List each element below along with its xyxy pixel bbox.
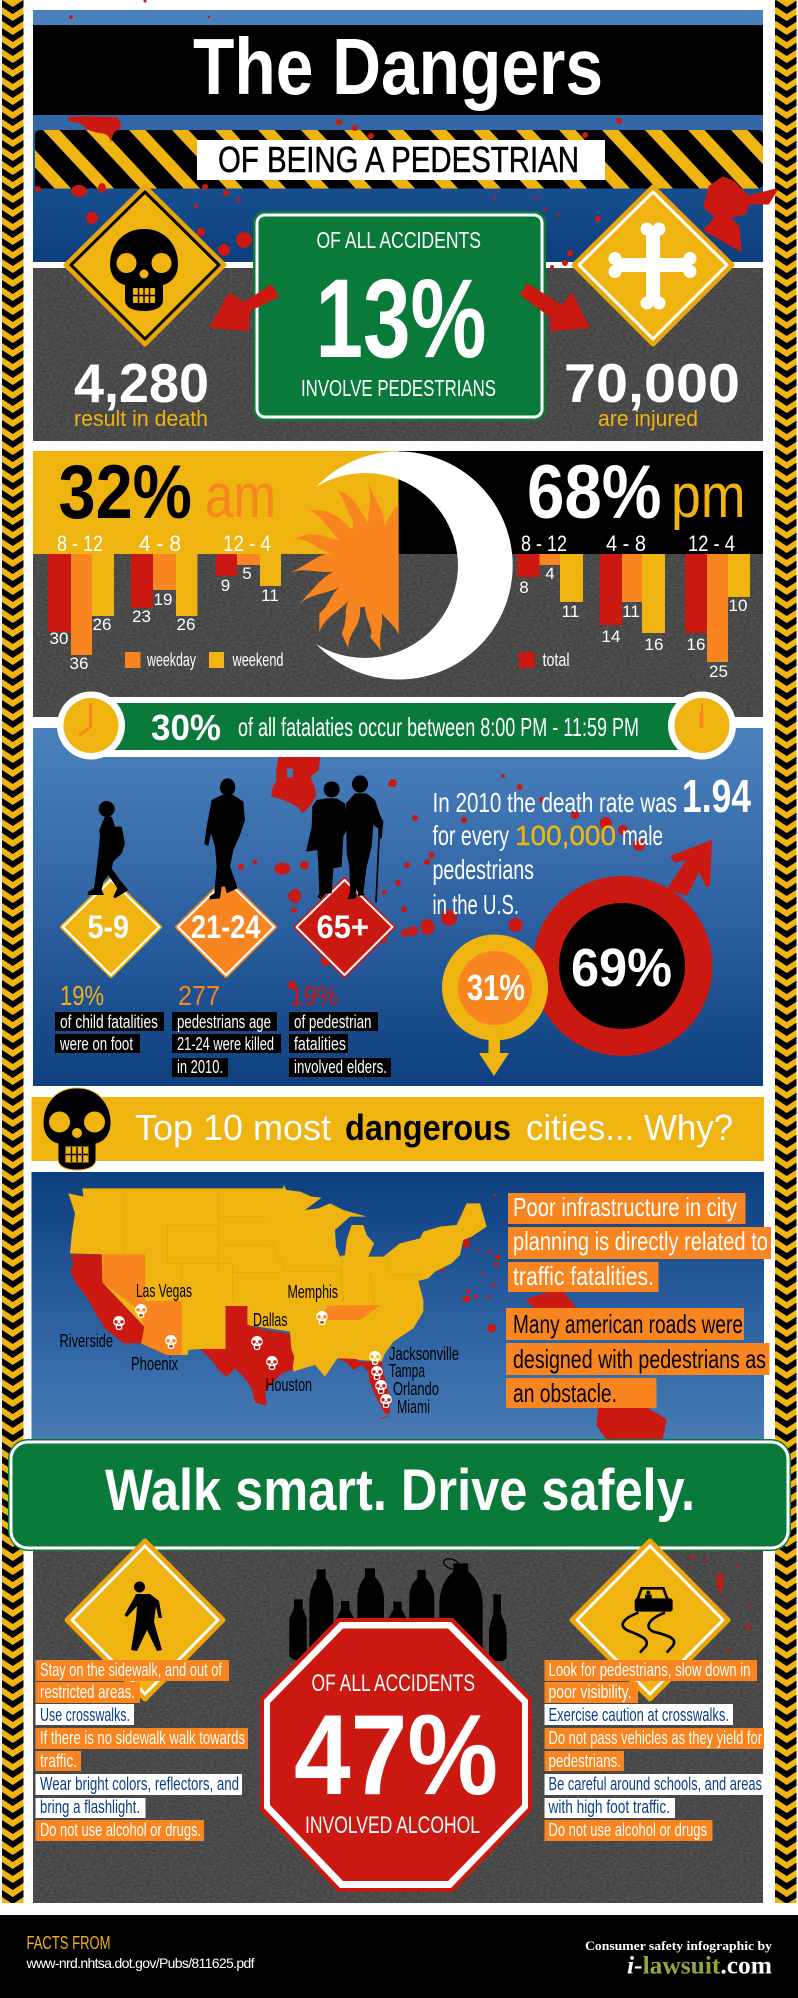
bar chart: am: 12 - 4 — [223, 531, 271, 556]
icon: skull warning sign — [66, 187, 224, 344]
bar chart: pm: 8 — [519, 578, 529, 597]
stat: elders: of pedestrian — [294, 1012, 372, 1032]
skull markers — [113, 1304, 392, 1408]
text block: american roads — [506, 1308, 770, 1408]
heading: 68% pm: 68% — [527, 450, 662, 535]
stat: young adults: 277 — [178, 980, 220, 1011]
legend: am: weekday — [146, 650, 196, 670]
panel: demographics — [33, 728, 763, 1086]
city labels: Memphis — [288, 1282, 338, 1302]
text block: poor infrastructure: Poor infrastructure in city — [513, 1192, 737, 1222]
text block: death rate: 1.94 — [682, 770, 751, 822]
legend: pm: total — [542, 650, 570, 670]
text block: poor infrastructure: traffic fatalities. — [513, 1261, 654, 1291]
list: driver tips: pedestrians. — [548, 1751, 621, 1771]
panel: time of day — [33, 450, 763, 717]
credit: Consumer safety infographic by — [585, 1939, 773, 1953]
text block: death rate: in the U.S. — [432, 889, 519, 920]
bar chart: am: 26 — [177, 615, 195, 634]
legend: am — [125, 650, 284, 670]
title: The Dangers — [193, 22, 603, 111]
stat: deaths: result in death — [74, 406, 208, 431]
icon: elderly couple — [306, 775, 383, 903]
title band — [33, 25, 763, 115]
stat: children: 19% — [60, 980, 104, 1011]
list: pedestrian tips: If there is no sidewalk walk towards — [40, 1728, 245, 1748]
icon: male symbol 69 percent — [532, 840, 712, 1056]
heading: 68% pm — [527, 450, 746, 535]
icon: sun — [289, 482, 399, 652]
list: pedestrian tips: Use crosswalks. — [40, 1705, 130, 1725]
icon: right clock — [668, 692, 736, 760]
bar chart: pm: 12 - 4 — [688, 531, 735, 556]
bar chart: pm: 10 — [729, 596, 747, 615]
stat: children — [55, 980, 164, 1054]
list: pedestrian tips: bring a flashlight. — [40, 1797, 140, 1817]
bar chart: pm: 16 — [687, 635, 705, 654]
bar chart: am: 36 — [70, 654, 88, 673]
bar chart: pm: 4 — [545, 564, 555, 583]
bar chart: pm — [517, 531, 750, 681]
stop sign: 47 percent alcohol: OF ALL ACCIDENTS — [312, 1670, 475, 1697]
blood splatter: map — [439, 1194, 665, 1445]
callout bar: 30 percent of fatalities — [57, 692, 736, 760]
icon: female symbol 31 percent: 31% — [467, 967, 525, 1008]
icon: age sign 5-9: 5-9 — [88, 909, 129, 945]
bar chart: am: 26 — [93, 615, 111, 634]
panel: map — [32, 1172, 764, 1447]
stat: injured: 70,000 — [564, 352, 740, 414]
text block: death rate: 100,000 — [515, 820, 616, 851]
bar chart: pm: 14 — [602, 627, 620, 646]
panel: header — [33, 10, 763, 441]
credit: i-lawsuit.com — [627, 1952, 772, 1980]
bar chart: am: 4 - 8 — [139, 531, 181, 556]
heading: top 10 cities: Top 10 most — [135, 1107, 331, 1148]
bar chart: am: 19 — [154, 590, 172, 609]
city labels: Phoenix — [131, 1354, 178, 1374]
arrow: to deaths — [209, 284, 279, 331]
stat: elders — [289, 980, 391, 1077]
stat: elders: 19% — [290, 980, 338, 1011]
sources: FACTS FROM — [26, 1933, 110, 1953]
stat: deaths: 4,280 — [74, 352, 209, 414]
hazard tape — [35, 130, 763, 188]
bar chart: pm: 4 - 8 — [606, 531, 646, 556]
sign: walk smart drive safely — [8, 1439, 791, 1551]
list: pedestrian tips: Do not use alcohol or drugs. — [40, 1820, 201, 1840]
text block: death rate: pedestrians — [432, 854, 534, 885]
city labels — [60, 1281, 459, 1417]
bar chart: pm: 25 — [709, 662, 728, 681]
stat: elders: fatalities — [294, 1034, 346, 1054]
list: driver tips: with high foot traffic. — [548, 1797, 670, 1817]
stat: children: were on foot — [59, 1034, 133, 1054]
city labels: Jacksonville — [389, 1344, 459, 1364]
icon: slippery car warning sign — [572, 1541, 728, 1699]
text block: death rate — [432, 770, 751, 920]
bar chart: am: 11 — [261, 586, 279, 605]
heading: 68% pm: pm — [671, 462, 746, 531]
icon: age sign 21-24: 21-24 — [191, 909, 261, 945]
panel: 13 percent sign: OF ALL ACCIDENTS — [316, 227, 481, 253]
subtitle box — [197, 140, 605, 180]
stat: injured: are injured — [598, 406, 698, 431]
credit — [585, 1939, 773, 1980]
legend: pm — [519, 650, 570, 670]
icon: pedestrian warning sign — [67, 1541, 223, 1699]
bar chart: pm: 11 — [622, 602, 640, 621]
icon: age sign 65+ — [296, 879, 394, 976]
sources — [26, 1933, 255, 1971]
text block: poor infrastructure — [508, 1192, 771, 1292]
stat: young adults: pedestrians age — [177, 1012, 271, 1032]
bar chart: am: 5 — [242, 564, 252, 583]
blood splatter: demographics — [238, 757, 645, 989]
panel: 13 percent sign: INVOLVE PEDESTRIANS — [301, 375, 496, 401]
bar chart: am: 30 — [50, 629, 68, 648]
panel: 13 percent sign: 13% — [316, 256, 486, 381]
list: pedestrian tips: traffic. — [40, 1751, 77, 1771]
icon: walking child — [87, 801, 128, 898]
icon: female symbol 31 percent — [442, 934, 548, 1076]
stat: young adults: in 2010. — [177, 1057, 223, 1077]
list: pedestrian tips: Stay on the sidewalk, and out of — [40, 1660, 223, 1680]
callout bar: 30 percent of fatalities: 30% — [151, 707, 221, 748]
list: pedestrian tips: restricted areas. — [40, 1682, 135, 1702]
bar chart: am: 8 - 12 — [57, 531, 103, 556]
icon: age sign 65+: 65+ — [316, 909, 369, 945]
blood splatter: right of tips — [690, 1555, 752, 1654]
icon: skull — [43, 1088, 111, 1170]
text block: death rate: for every — [432, 820, 509, 851]
blood splatter: header — [35, 0, 776, 269]
city labels: Riverside — [60, 1331, 113, 1351]
arrow: to injuries — [520, 283, 590, 331]
right hazard chevron stripe — [775, 0, 796, 1903]
subtitle: OF BEING A PEDESTRIAN — [218, 139, 579, 180]
list: pedestrian tips: Wear bright colors, reflectors, and — [40, 1774, 239, 1794]
chart: US map — [60, 1184, 487, 1419]
icon: age sign 21-24 — [177, 879, 275, 976]
city labels: Dallas — [253, 1310, 288, 1330]
city labels: Houston — [266, 1375, 312, 1395]
city labels: Orlando — [393, 1379, 439, 1399]
text block: death rate: In 2010 the death rate was — [432, 787, 677, 818]
bar chart: am — [48, 531, 281, 673]
icon: left clock — [57, 692, 125, 760]
heading: top 10 cities — [32, 1088, 764, 1170]
panel: 13 percent sign — [253, 211, 546, 421]
bar chart: pm: 8 - 12 — [521, 531, 567, 556]
heading: top 10 cities: cities... Why? — [526, 1107, 733, 1148]
stop sign: 47 percent alcohol: INVOLVED ALCOHOL — [305, 1812, 480, 1839]
icon: crossbones warning sign — [574, 187, 732, 344]
stat: elders: involved elders. — [294, 1057, 387, 1077]
text block: american roads: an obstacle. — [513, 1378, 617, 1408]
city labels: Miami — [397, 1397, 430, 1417]
sign: walk smart drive safely: Walk smart. Drive safely. — [105, 1458, 695, 1523]
stat: young adults — [172, 980, 281, 1077]
icon: male symbol 69 percent: 69% — [571, 938, 672, 998]
panel: footer — [0, 1915, 798, 1998]
icon: bottles — [289, 1557, 507, 1661]
stat: young adults: 21-24 were killed — [177, 1034, 274, 1054]
city labels: Tampa — [389, 1361, 426, 1381]
bar chart: pm: 11 — [562, 602, 579, 621]
heading: 32% am: am — [205, 462, 276, 531]
sources: www-nrd.nhtsa.dot.gov/Pubs/811625.pdf — [26, 1955, 255, 1971]
city labels: Las Vegas — [136, 1281, 192, 1301]
heading: 32% am — [58, 450, 276, 535]
icon: walking adult — [204, 778, 245, 899]
list: driver tips: Exercise caution at crosswalks. — [548, 1705, 729, 1725]
bar chart: pm: 16 — [645, 635, 663, 654]
list: pedestrian tips — [36, 1660, 248, 1841]
list: driver tips: poor visibility. — [548, 1682, 632, 1702]
heading: top 10 cities: dangerous — [345, 1107, 511, 1148]
list: driver tips: Do not use alcohol or drugs — [548, 1820, 707, 1840]
heading: 32% am: 32% — [58, 450, 192, 535]
stop sign: 47 percent alcohol — [260, 1618, 532, 1892]
legend: am: weekend — [232, 650, 284, 670]
icon: age sign 5-9 — [62, 879, 160, 976]
stat: children: of child fatalities — [60, 1012, 158, 1032]
panel: safety tips — [33, 1540, 763, 1903]
text block: death rate: male — [622, 820, 663, 851]
bar chart: am: 9 — [221, 576, 230, 595]
bar chart: am: 23 — [132, 607, 151, 626]
icon: crescent moon — [316, 452, 513, 680]
stop sign: 47 percent alcohol: 47% — [294, 1692, 498, 1819]
left hazard chevron stripe — [2, 0, 24, 1903]
list: driver tips — [544, 1660, 764, 1841]
